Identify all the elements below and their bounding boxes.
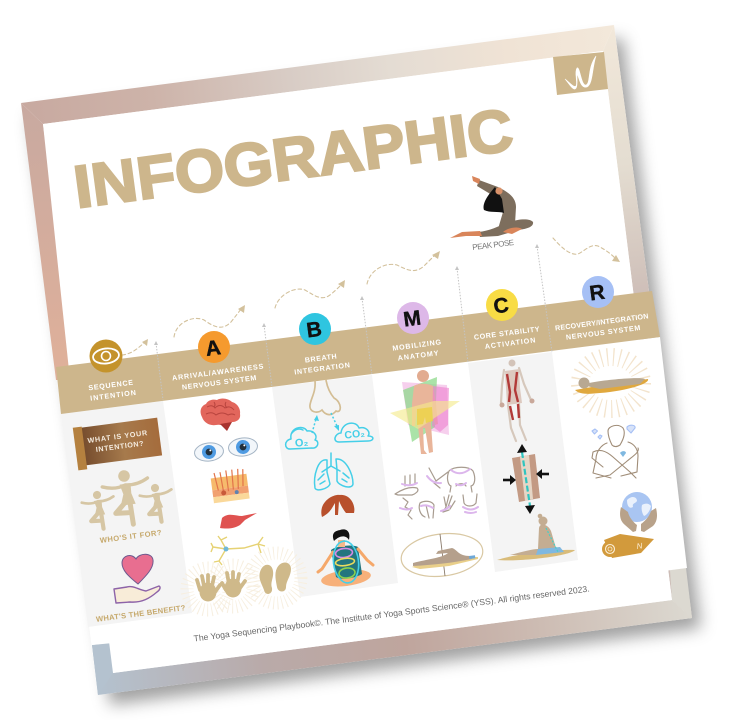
icon: joint diagrams [395,467,478,519]
hand right [222,572,245,598]
label [473,324,542,352]
label [392,337,443,363]
label: MOBILIZING [392,337,442,353]
label [554,311,650,343]
icon: body planes figure [390,370,460,454]
icon: eyes [194,437,258,462]
label: INTENTION [90,388,136,403]
badge: C [486,289,518,321]
column dividers [154,244,552,400]
label [171,362,265,393]
title: INFOGRAPHIC [70,96,517,221]
icon: skeleton with core muscles [500,360,534,441]
icon: seated twist on mat [497,514,575,560]
hand left [197,575,220,602]
badge: R: R [588,281,606,305]
icon: globe in hands on mat: N [636,541,643,551]
white page area [43,51,672,673]
badge: B: B [305,318,323,342]
label: ACTIVATION [484,335,536,351]
icon: hands and feet with rays [187,553,301,610]
badge: eye [90,340,122,372]
step: mobilizing anatomy [390,302,485,581]
step: recovery integration [554,276,657,558]
badge: R [582,276,614,308]
icon: oval with reclined figure [399,529,485,581]
footer credit: The Yoga Sequencing Playbook©. The Institute of Yoga Sports Science® (YSS). All rights reserved 2023. [193,584,590,643]
scroll banner: INTENTION? [95,439,144,454]
gray column 1 [61,401,192,627]
icon: O2 cloud [286,428,318,450]
icon: children in tree pose [81,467,175,531]
header band [56,291,660,414]
badge: A: A [204,336,222,361]
icon: open hand [114,586,160,603]
scroll banner: WHAT IS YOUR [87,428,148,445]
icon: meditating figure [318,529,373,589]
white lower panel covering frame [61,337,687,645]
label: NERVOUS SYSTEM [565,323,641,342]
progress arrow 3 [275,280,345,308]
label: ANATOMY [397,348,439,363]
label: RECOVERY/INTEGRATION [554,311,649,333]
label: CORE STABILITY [473,324,540,342]
rays [187,553,301,610]
label [88,377,136,403]
progress arrow 1 [122,339,148,355]
gray column 3 [272,375,398,597]
icon: brain [201,399,240,431]
badge: M: M [402,307,422,332]
icon: self-hug [592,425,638,478]
icon: core cross-section with arrows [503,444,549,514]
label: INTEGRATION [294,360,350,377]
icon: CO2 cloud [335,423,373,442]
question: what is the benefit: WHAT'S THE BENEFIT? [95,603,186,624]
badge: C: C [492,294,510,318]
peak pose figure [450,176,533,238]
icon: muscle [220,513,257,529]
label [292,350,350,377]
icon: heart [122,554,153,584]
progress arrow 5 [553,238,620,262]
step: core stability activation [473,289,575,560]
progress arrow 4 [367,251,440,284]
progress arrow 2 [174,305,245,337]
icon: O2 cloud: O₂ [294,436,309,450]
icon: diaphragm [321,495,354,517]
badge: A [198,331,230,363]
icon: CO2 cloud: CO₂ [344,427,366,442]
label: NERVOUS SYSTEM [181,373,257,392]
peak pose label: PEAK POSE [472,238,515,252]
scroll banner [73,417,163,470]
step: sequence intention [73,340,186,624]
step: breath integration [286,313,373,589]
gray column 5 [468,352,578,572]
label: SEQUENCE [88,378,134,392]
step: arrival awareness [171,331,301,610]
label: ARRIVAL/AWARENESS [171,362,264,382]
icon: nose [310,380,340,415]
label: BREATH [304,351,337,365]
icon: resting pose with rays [575,357,648,409]
feet [259,565,273,594]
badge: B [299,313,331,345]
question: who is it for: WHO'S IT FOR? [99,528,162,545]
icon: globe in hands on mat [602,492,657,558]
icon: lungs [315,453,353,490]
icon: neuron [211,536,265,565]
icon: skin layers [210,468,250,503]
badge: M [397,302,429,334]
logo [553,52,608,95]
breath arrows [312,413,339,433]
